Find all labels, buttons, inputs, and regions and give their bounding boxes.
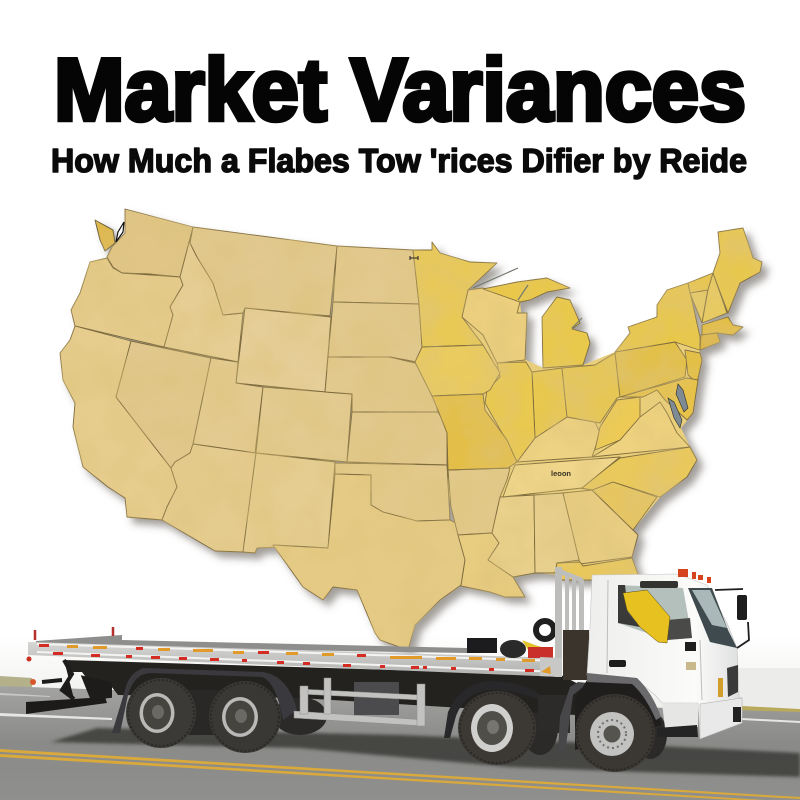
state: Idaho xyxy=(164,227,243,362)
tire front xyxy=(575,694,655,772)
white lane line far xyxy=(0,693,50,697)
rim xyxy=(222,697,258,737)
bed side rail xyxy=(28,642,561,677)
tire mid xyxy=(458,691,536,765)
horizon haze xyxy=(0,635,800,710)
window frame dark left xyxy=(618,585,640,627)
rim center xyxy=(604,726,620,742)
chassis xyxy=(64,660,590,715)
cab back block xyxy=(563,630,589,680)
mirror visor xyxy=(640,581,678,588)
light three xyxy=(698,575,703,580)
axle nut xyxy=(235,709,247,723)
state: North Carolina xyxy=(580,447,697,497)
guard rail bottom xyxy=(294,711,425,726)
far wheel front xyxy=(633,711,667,759)
lower cab panel xyxy=(662,703,698,728)
state: Michigan upper xyxy=(483,278,570,302)
state: Olympic peninsula xyxy=(95,220,115,251)
right horizon wall xyxy=(738,668,800,708)
grass left xyxy=(0,676,32,688)
dark wheel arch xyxy=(575,680,662,750)
yellow map reflection xyxy=(623,590,670,643)
state: Missouri xyxy=(432,394,517,470)
light one xyxy=(678,569,688,577)
guard post b xyxy=(324,678,331,714)
step xyxy=(657,725,698,737)
asphalt xyxy=(0,686,800,800)
state: Arkansas xyxy=(448,468,510,535)
double yellow line upper xyxy=(0,749,800,799)
state: California xyxy=(60,326,177,520)
tread rear one xyxy=(128,680,194,746)
between axles block xyxy=(175,690,225,735)
side box xyxy=(538,695,570,733)
turn signal xyxy=(718,678,723,697)
coil xyxy=(536,621,554,639)
state: Alabama xyxy=(534,493,580,573)
hub mid xyxy=(471,704,513,752)
side grab xyxy=(685,642,696,651)
rack top rail xyxy=(555,567,583,583)
rack slat one xyxy=(565,575,569,630)
guard post c xyxy=(417,684,425,726)
state: Texas xyxy=(273,474,465,650)
truck shadow xyxy=(51,728,800,777)
state: Kansas xyxy=(347,412,447,465)
state: Colorado xyxy=(256,387,352,462)
windshield highlight xyxy=(692,590,727,628)
rim center xyxy=(143,696,171,730)
cab body xyxy=(587,574,742,739)
lower front fender xyxy=(558,682,588,753)
state: New Mexico xyxy=(243,453,335,553)
grass right xyxy=(742,706,800,713)
axle nut xyxy=(487,720,499,734)
reflector row red xyxy=(39,644,534,672)
yellow equipment xyxy=(522,640,545,650)
reflectors on bed xyxy=(39,644,535,672)
hub rear two xyxy=(222,697,258,737)
rear circular reflector xyxy=(26,656,32,662)
double yellow line lower xyxy=(0,754,765,800)
rear under-ride step xyxy=(26,697,107,714)
bumper vent xyxy=(733,707,741,722)
rack slat two xyxy=(572,578,576,630)
bed end cap xyxy=(540,657,562,677)
state: Tennessee xyxy=(503,457,620,497)
hub rear one xyxy=(140,693,174,733)
state: Indiana xyxy=(532,368,567,438)
Puget Sound water xyxy=(116,222,124,242)
rear fender xyxy=(112,668,297,733)
guard post a xyxy=(300,686,308,714)
state: Nebraska xyxy=(325,357,438,412)
state: Illinois xyxy=(485,362,535,462)
state: Wisconsin xyxy=(462,288,527,363)
badge xyxy=(686,662,696,670)
state: Wyoming xyxy=(236,308,331,392)
state: Maryland Delaware xyxy=(620,378,698,420)
road scene xyxy=(0,676,800,800)
rack slat three xyxy=(579,580,584,630)
small map label: leoon xyxy=(551,469,571,478)
white stripe low xyxy=(37,651,561,673)
far wheel mid xyxy=(522,701,558,755)
grille xyxy=(727,665,738,697)
roof lights xyxy=(678,569,711,583)
state: Mississippi xyxy=(488,495,535,577)
state: Pennsylvania xyxy=(615,342,687,397)
axle nut xyxy=(152,705,164,719)
state: Washington xyxy=(107,209,193,277)
rim center xyxy=(226,700,254,734)
state: Northern strip xyxy=(688,273,713,293)
state: Georgia xyxy=(563,490,638,564)
red box xyxy=(528,647,553,658)
side guard frame xyxy=(294,678,425,726)
state: New Hampshire xyxy=(702,273,727,323)
rim center xyxy=(477,711,507,745)
rim xyxy=(590,712,634,756)
front fender arch xyxy=(587,673,661,720)
tread mid xyxy=(460,693,534,763)
door seam back xyxy=(607,580,702,700)
tread rear two xyxy=(211,683,279,751)
state: Arizona xyxy=(162,444,256,552)
state: Louisiana xyxy=(458,533,525,597)
state: Kentucky xyxy=(517,417,600,462)
window interior xyxy=(667,618,692,640)
state: Michigan lower xyxy=(542,297,590,368)
rack main post xyxy=(555,567,562,677)
title: Market Variances xyxy=(54,40,746,139)
rear lift lights xyxy=(35,627,113,640)
state: Nevada xyxy=(116,341,211,468)
state: Vermont xyxy=(690,288,708,323)
rear hitch frame xyxy=(42,660,110,699)
state: North Dakota xyxy=(333,246,419,304)
state: Iowa xyxy=(415,345,500,396)
state: Florida xyxy=(555,558,640,580)
mirror arm xyxy=(715,589,749,648)
subtitle: How Much a Flabes Tow 'rices Difier by Reide xyxy=(51,143,747,180)
flatbed tow truck xyxy=(26,567,749,772)
guard rail top xyxy=(300,689,420,700)
state: Virginia xyxy=(592,402,690,457)
state: Maine xyxy=(713,228,762,313)
mid fender xyxy=(444,681,540,738)
rear tail light xyxy=(30,679,36,685)
toolbox xyxy=(467,638,497,653)
hub front xyxy=(590,712,634,756)
Lake Michigan strait details xyxy=(473,268,582,328)
map gap filler xyxy=(420,292,700,575)
tire rear two xyxy=(209,681,281,753)
state: Ohio xyxy=(562,353,620,423)
state: South Carolina xyxy=(592,482,657,530)
Chesapeake Bay xyxy=(668,384,688,428)
state: Oregon xyxy=(71,258,183,347)
state: West Virginia xyxy=(595,397,640,450)
small map marker xyxy=(410,256,418,260)
state: South Dakota xyxy=(328,302,422,363)
tire rear one xyxy=(126,678,196,748)
rim xyxy=(140,693,174,733)
white lane line right xyxy=(742,718,800,723)
bed far rail xyxy=(36,635,467,653)
bay inlet lower xyxy=(668,398,682,428)
bolt ring xyxy=(598,720,626,748)
state: Montana xyxy=(190,227,337,316)
state: New York xyxy=(615,283,700,352)
door handle xyxy=(609,660,626,667)
reflector row orange xyxy=(67,645,535,662)
tread front xyxy=(577,696,653,770)
battery block xyxy=(354,682,399,715)
state: Connecticut xyxy=(700,333,720,350)
cab side window xyxy=(618,585,692,640)
orange end reflector xyxy=(541,666,551,674)
state: Utah xyxy=(193,358,263,453)
white stripe on rail xyxy=(37,643,561,662)
state: Minnesota xyxy=(413,242,497,347)
light four xyxy=(707,577,711,583)
white lane line left xyxy=(0,713,112,720)
state: Oklahoma xyxy=(335,463,450,521)
rim xyxy=(471,704,513,752)
hose reel xyxy=(500,640,526,658)
map of US states xyxy=(60,209,762,650)
tail wall rack xyxy=(555,567,584,677)
light two xyxy=(692,572,696,579)
side mirror xyxy=(737,595,747,620)
bumper xyxy=(700,698,742,739)
bay inlet upper xyxy=(676,384,688,412)
state: New Jersey xyxy=(685,350,702,383)
windshield xyxy=(688,588,737,648)
far wheel rear xyxy=(273,697,327,735)
state: Massachusetts xyxy=(702,317,743,335)
